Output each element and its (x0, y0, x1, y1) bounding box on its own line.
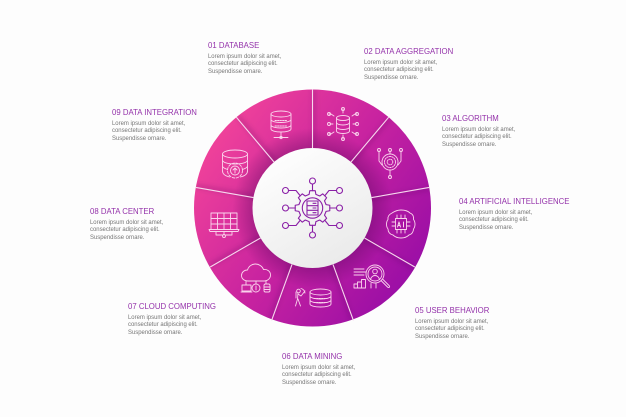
text block: 05 user behavior: Lorem ipsum dolor sit amet, (415, 319, 488, 325)
icon: data centre (209, 213, 239, 238)
text block: 01 database: 01 DATABASE (208, 41, 259, 50)
text block: 04 artificial intelligence: Suspendisse ornare. (459, 224, 513, 230)
text block: 04 artificial intelligence: consectetur adipiscing elit. (459, 217, 529, 223)
text block: 09 data integration: consectetur adipiscing elit. (112, 128, 182, 134)
icon: centre gear with network (282, 178, 342, 238)
text block: 05 user behavior: consectetur adipiscing elit. (415, 326, 485, 332)
icon: user behavior (354, 265, 390, 288)
ring of nine segments (194, 89, 431, 326)
icon: data mining (296, 288, 331, 307)
text block: 02 data aggregation: Suspendisse ornare. (364, 74, 418, 80)
text block: 04 artificial intelligence (459, 197, 570, 230)
text block: 08 data center: 08 DATA CENTER (90, 207, 154, 216)
text block: 09 data integration: 09 DATA INTEGRATION (112, 108, 197, 117)
text block: 04 artificial intelligence: 04 ARTIFICIAL INTELLIGENCE (459, 197, 570, 206)
text block: 04 artificial intelligence: Lorem ipsum dolor sit amet, (459, 210, 532, 216)
text block: 07 cloud computing: Lorem ipsum dolor sit amet, (128, 315, 201, 321)
icon: data aggregation (328, 108, 358, 140)
text block: 01 database: Suspendisse ornare. (208, 68, 262, 74)
text block: 07 cloud computing: Suspendisse ornare. (128, 330, 182, 336)
text block: 01 database: Lorem ipsum dolor sit amet, (208, 54, 281, 60)
text block: 02 data aggregation: Lorem ipsum dolor sit amet, (364, 60, 437, 66)
text block: 03 algorithm: consectetur adipiscing elit. (442, 134, 512, 140)
text block: 03 algorithm: Suspendisse ornare. (442, 142, 496, 148)
text block: 02 data aggregation: consectetur adipiscing elit. (364, 67, 434, 73)
text block: 08 data center: Suspendisse ornare. (90, 234, 144, 240)
text block: 06 data mining: 06 DATA MINING (282, 352, 342, 361)
text block: 05 user behavior: Suspendisse ornare. (415, 334, 469, 340)
text block: 09 data integration: Suspendisse ornare. (112, 136, 166, 142)
text block: 05 user behavior (415, 306, 489, 340)
text block: 09 data integration (112, 108, 197, 142)
text block: 06 data mining: Lorem ipsum dolor sit amet, (282, 365, 355, 371)
text block: 09 data integration: Lorem ipsum dolor sit amet, (112, 121, 185, 127)
text block: 02 data aggregation: 02 DATA AGGREGATION (364, 47, 453, 56)
icon: cloud computing (241, 264, 270, 292)
text block: 08 data center: Lorem ipsum dolor sit amet, (90, 220, 163, 226)
icon: artificial intelligence (386, 210, 415, 238)
icon: data integration (222, 150, 248, 178)
icon: algorithm (378, 148, 402, 178)
text block: 03 algorithm: 03 ALGORITHM (442, 114, 499, 123)
text block: 08 data center: consectetur adipiscing elit. (90, 227, 160, 233)
text block: 05 user behavior: 05 USER BEHAVIOR (415, 306, 489, 315)
text block: 01 database: consectetur adipiscing elit. (208, 61, 278, 67)
text block: 07 cloud computing (128, 302, 216, 336)
text block: 06 data mining: consectetur adipiscing elit. (282, 372, 352, 378)
text block: 08 data center (90, 207, 163, 240)
text block: 07 cloud computing: 07 CLOUD COMPUTING (128, 302, 216, 311)
text block: 01 database (208, 41, 281, 74)
icon: database (271, 111, 291, 139)
circular diagram (194, 89, 431, 326)
centre disc (252, 148, 372, 268)
text block: 03 algorithm: Lorem ipsum dolor sit amet, (442, 127, 515, 133)
text block: 06 data mining: Suspendisse ornare. (282, 380, 336, 386)
text block: 02 data aggregation (364, 47, 453, 80)
text block: 07 cloud computing: consectetur adipiscing elit. (128, 322, 198, 328)
text block: 06 data mining (282, 352, 355, 386)
text block: 03 algorithm (442, 114, 515, 148)
